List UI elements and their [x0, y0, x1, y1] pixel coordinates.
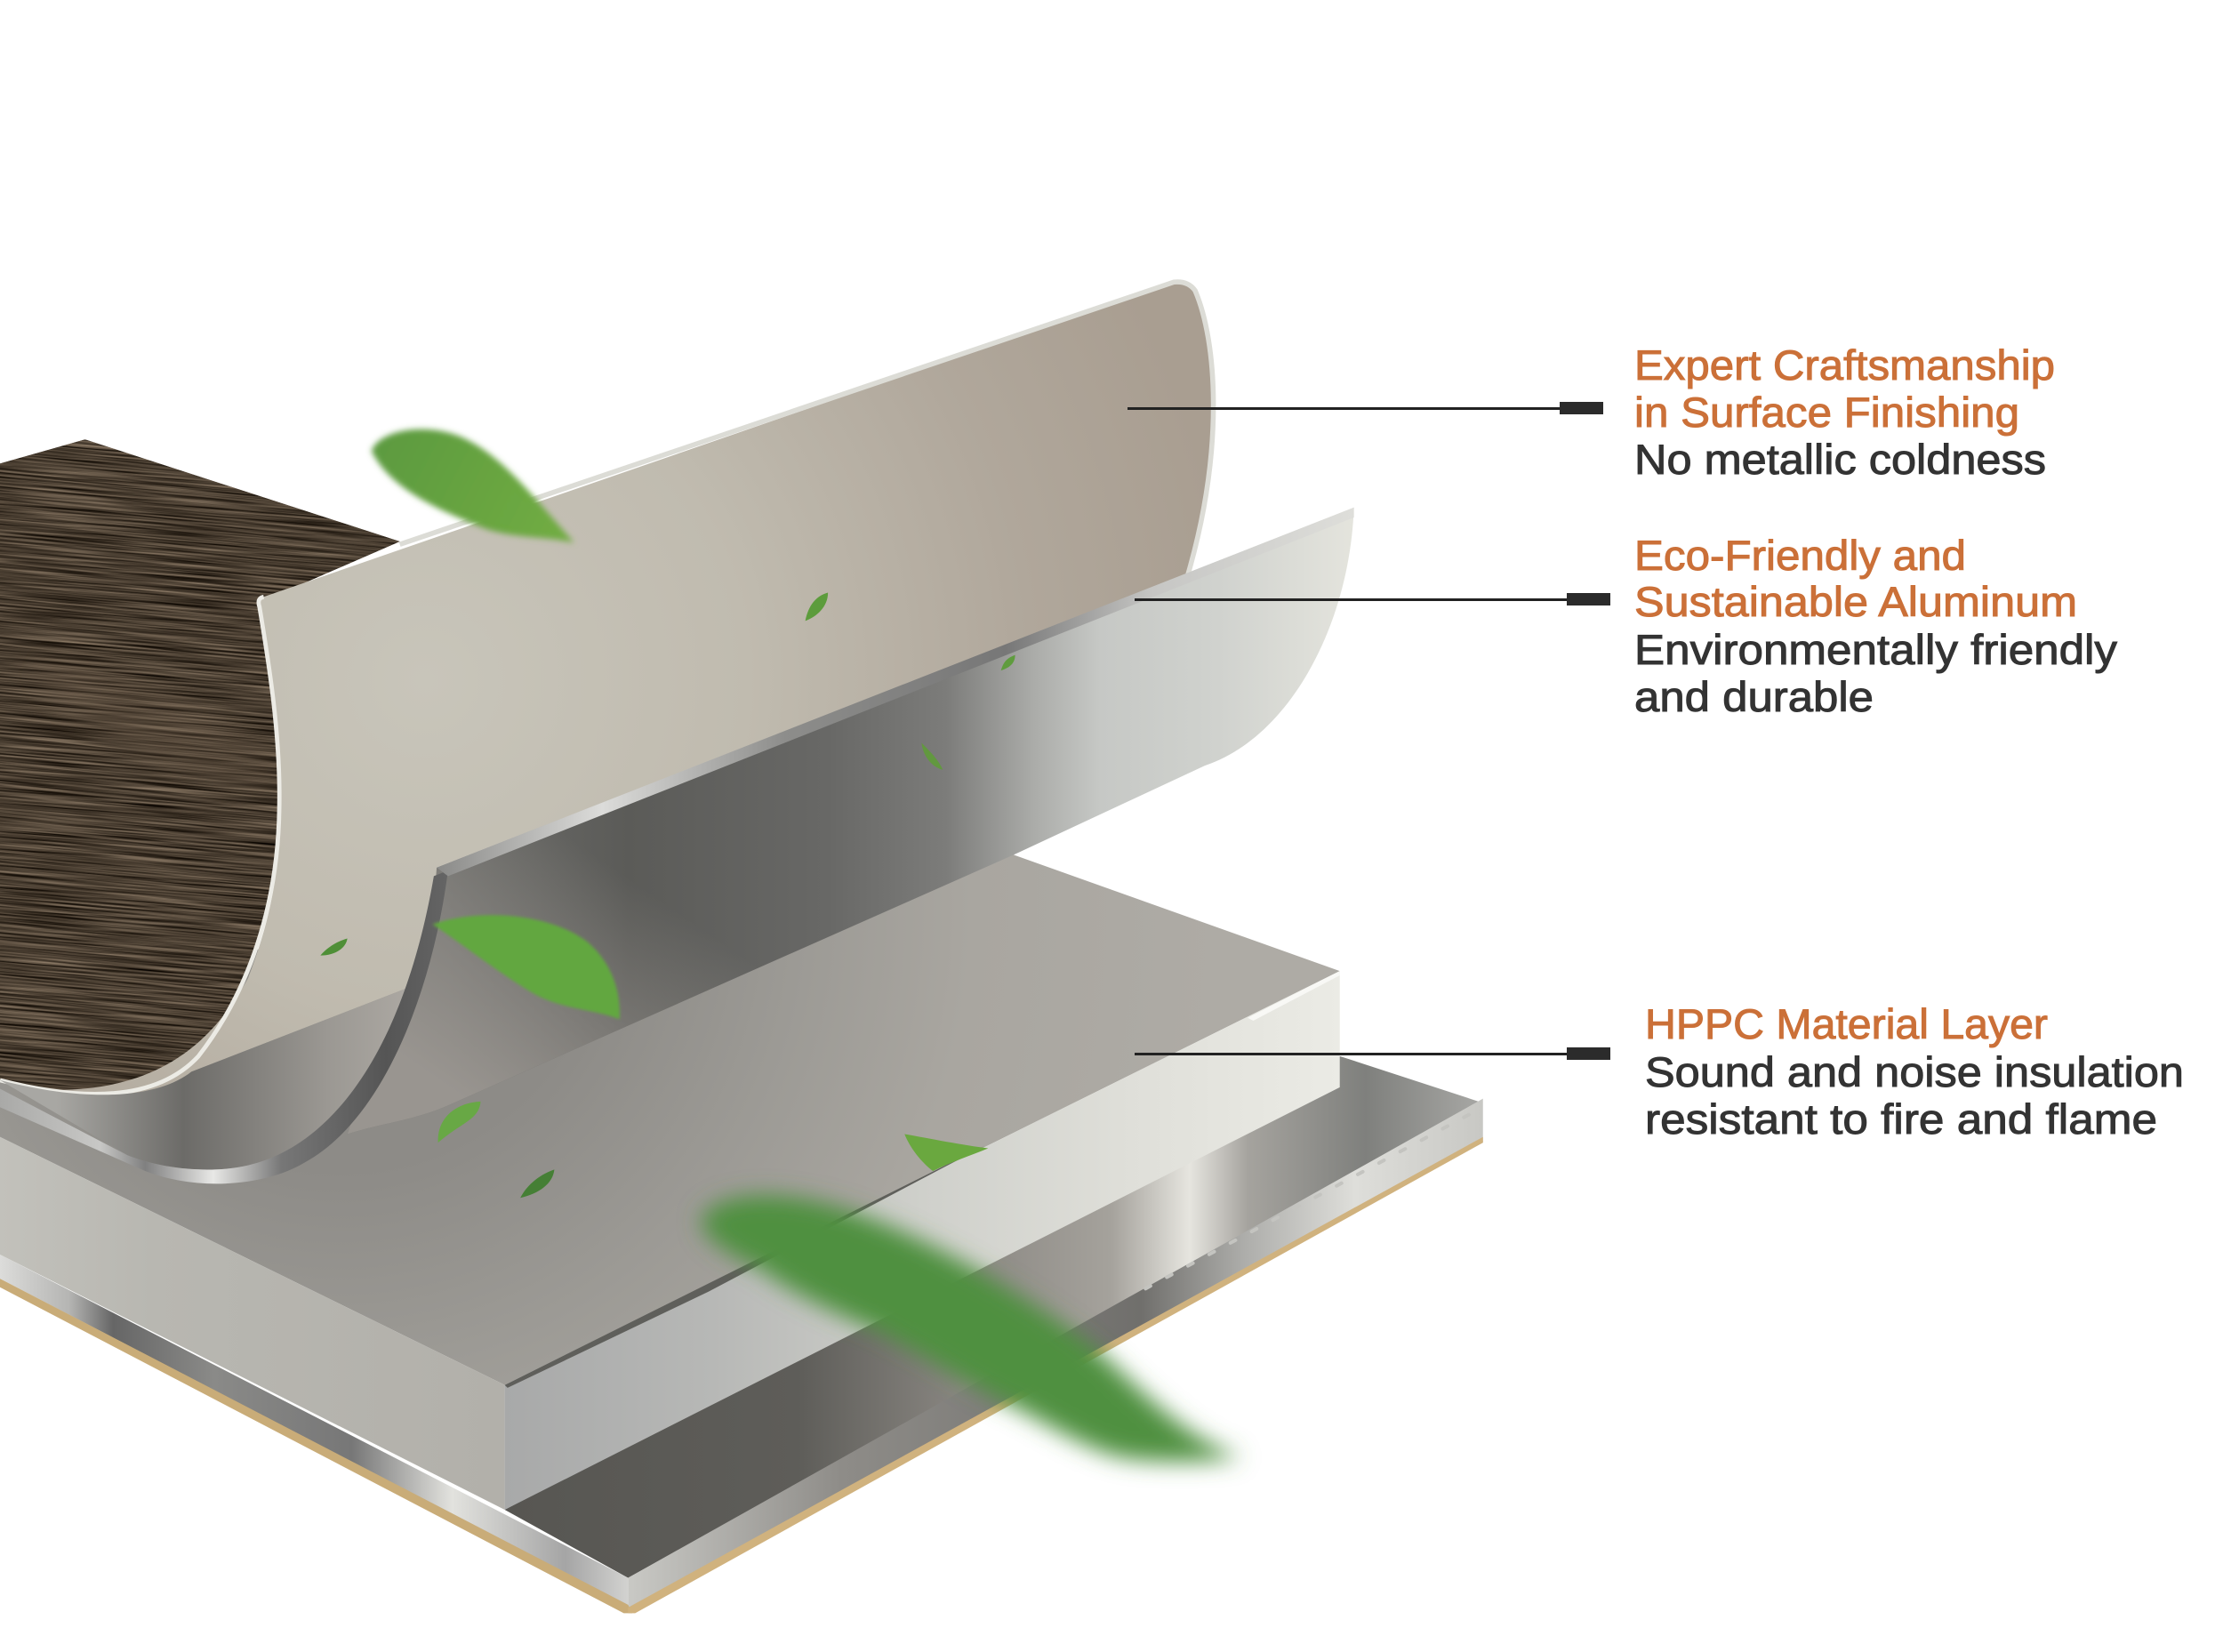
aluminum sheet top edge: [437, 508, 1354, 876]
small leaf 3: [921, 742, 943, 770]
text block: eco-friendly aluminum: and durable: [1634, 673, 1874, 720]
base aluminum board: [0, 1056, 1483, 1613]
text block: expert craftsmanship: Expert Craftsmanship: [1634, 341, 2055, 389]
large blurred leaf, foreground: [701, 1196, 1242, 1462]
text block: eco-friendly aluminum: Sustainable Aluminum: [1634, 578, 2077, 625]
small leaf 2: [1001, 655, 1015, 670]
leader line: aluminum: [1135, 593, 1610, 605]
text block: HPPC material layer: HPPC Material Layer: [1645, 1000, 2048, 1047]
text block: eco-friendly aluminum: [1634, 532, 2118, 720]
text block: HPPC material layer: resistant to fire and flame: [1645, 1095, 2157, 1143]
small leaf 4: [320, 938, 348, 956]
small leaf 6: [520, 1169, 554, 1198]
text block: expert craftsmanship: [1634, 341, 2055, 483]
aluminum sheet inner surface: [348, 508, 1354, 1135]
silver curved sheet edge: [0, 870, 448, 1183]
large blurred leaf, upper: [372, 429, 574, 543]
beige surface finishing sheet: [0, 282, 1214, 1097]
text block: expert craftsmanship: in Surface Finishing: [1634, 389, 2019, 436]
illustration: layered composite panel: [0, 282, 1483, 1613]
leaf, centre: [432, 915, 620, 1019]
small leaf 7: [904, 1135, 988, 1171]
wood grain surface layer: [0, 439, 400, 1090]
text block: eco-friendly aluminum: Environmentally friendly: [1634, 626, 2118, 673]
text block: eco-friendly aluminum: Eco-Friendly and: [1634, 532, 1966, 579]
text block: HPPC material layer: [1645, 1000, 2184, 1143]
text block: expert craftsmanship: No metallic coldness: [1634, 436, 2046, 483]
text block: HPPC material layer: Sound and noise insulation: [1645, 1048, 2184, 1095]
small leaf 5: [438, 1102, 481, 1143]
leader line: HPPC: [1135, 1047, 1610, 1060]
small leaf 1: [806, 592, 828, 621]
leader line: surface finishing: [1128, 402, 1603, 414]
HPPC material layer block: [0, 854, 1340, 1510]
underside of aluminum curl: [0, 984, 418, 1170]
